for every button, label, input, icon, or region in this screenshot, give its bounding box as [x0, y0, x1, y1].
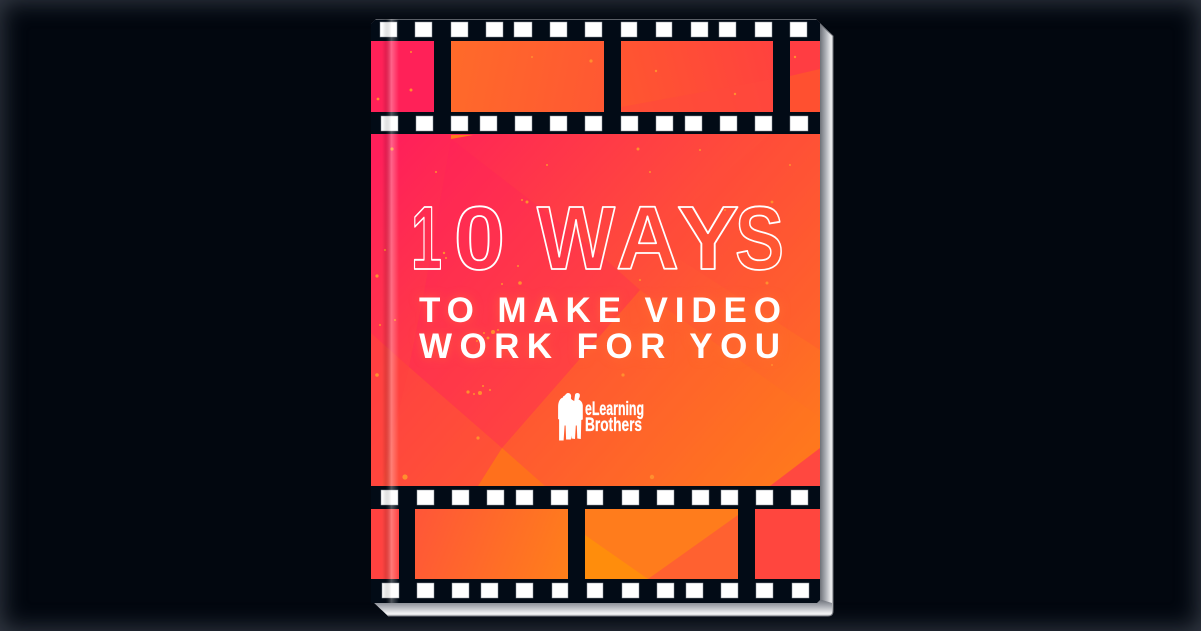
- heading: 10 WAYS: Y: [677, 189, 739, 289]
- top strip sprocket holes row 2: [381, 116, 808, 131]
- logo wordmark: eLearning: [585, 399, 644, 420]
- page block: right and bottom edges: [371, 19, 833, 616]
- subheading: to make video work for you: WORK FOR YOU: [419, 327, 780, 366]
- bottom strip sprocket holes row 1: [381, 490, 808, 505]
- heading: 10 WAYS: S: [735, 189, 784, 289]
- speckles: [375, 147, 791, 480]
- book mockup: [371, 19, 834, 616]
- top strip sprocket holes row 1: [380, 22, 807, 37]
- subheading: to make video work for you: TO MAKE VIDEO: [419, 291, 781, 330]
- heading: 10 WAYS: [411, 189, 784, 289]
- heading: 10 WAYS: W: [537, 189, 615, 289]
- spine highlight: [383, 19, 398, 603]
- icon: two brothers silhouette: [558, 393, 583, 440]
- top film strip frames: [371, 41, 820, 112]
- book cover: [371, 19, 820, 604]
- heading: 10 WAYS: A: [616, 189, 679, 289]
- bottom film strip frames: [371, 509, 820, 579]
- heading: 10 WAYS: 1: [411, 189, 442, 289]
- logo: eLearning Brothers: [558, 393, 649, 440]
- heading: 10 WAYS: 0: [454, 189, 505, 289]
- subheading: to make video work for you: [419, 291, 781, 366]
- cover art background with facets: [371, 134, 820, 486]
- bottom strip sprocket holes row 2: [382, 583, 809, 598]
- logo wordmark: Brothers: [585, 415, 642, 436]
